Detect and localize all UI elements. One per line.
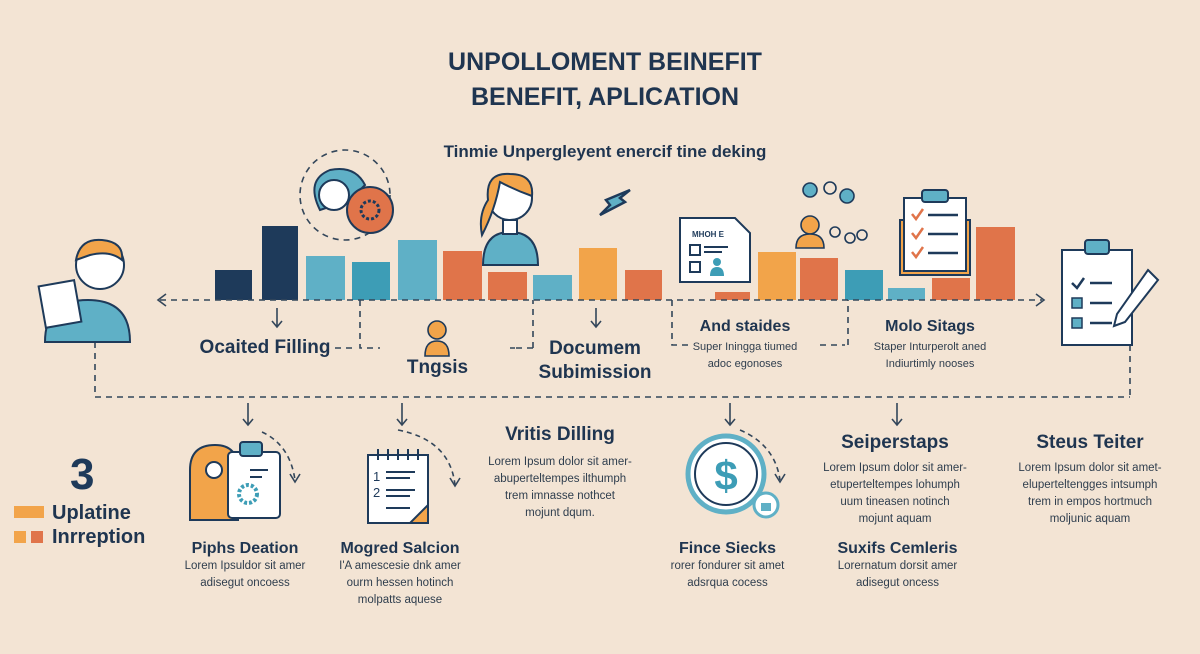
icon: dollar coin — [688, 436, 778, 517]
icon: clipboard right — [1062, 240, 1158, 345]
icon: document — [680, 218, 750, 282]
title — [448, 48, 762, 111]
text: Indiurtimly nooses — [886, 358, 974, 370]
title: UNPOLLOMENT BEINEFIT — [448, 48, 762, 76]
text: ourm hessen hotinch — [347, 577, 453, 589]
text: Vritis Dilling — [505, 424, 615, 445]
icon: small person — [425, 321, 449, 356]
text: Mogred Salcion — [340, 540, 460, 557]
text: Lorem Ipsum dolor sit amer- — [488, 456, 632, 468]
text: I'A amescesie dnk amer — [339, 560, 461, 572]
text: adoc egonoses — [708, 358, 782, 370]
legend: 3 — [70, 450, 94, 499]
icon: woman — [481, 174, 538, 265]
text: trem in empos hortmuch — [1028, 496, 1152, 508]
text: Suxifs Cemleris — [837, 540, 958, 557]
text: trem imnasse nothcet — [505, 490, 615, 502]
bottom items — [185, 540, 306, 589]
text: Steus Teiter — [1036, 432, 1144, 453]
text: Uplatine — [52, 502, 131, 524]
icon: notepad — [368, 449, 428, 523]
text: molpatts aquese — [358, 594, 442, 606]
bottom items: Lorem Ipsuldor sit amer — [185, 560, 305, 572]
text: mojunt aquam — [859, 513, 931, 525]
text: Fince Siecks — [679, 540, 776, 557]
bottom items: Piphs Deation — [192, 540, 298, 557]
bar chart — [215, 226, 1015, 300]
icon: notepad: 2 — [373, 485, 380, 500]
icon: arrow up right — [600, 190, 630, 215]
text: Staper Inturperolt aned — [874, 341, 986, 353]
text: uum tineasen notinch — [840, 496, 950, 508]
icon: people network — [796, 182, 867, 248]
icon: document: MHOH E — [692, 230, 725, 239]
step labels: Ocaited Filling — [200, 337, 330, 358]
bottom items: adisegut oncoess — [200, 577, 290, 589]
text: Seiperstaps — [841, 432, 949, 453]
text: adisegut oncess — [856, 577, 939, 589]
text: Lorem Ipsum dolor sit amer- — [823, 462, 967, 474]
text: abuperteltempes ilthumph — [494, 473, 626, 485]
text: Lorernatum dorsit amer — [838, 560, 957, 572]
text: adsrqua cocess — [687, 577, 768, 589]
legend squares — [14, 506, 44, 543]
icon: notepad: 1 — [373, 469, 380, 484]
text: Super Iningga tiumed — [693, 341, 797, 353]
text: Subimission — [539, 362, 651, 383]
text: etuperteltempes lohumph — [830, 479, 960, 491]
text: Tngsis — [407, 357, 468, 378]
title: BENEFIT, APLICATION — [471, 83, 739, 111]
icon: head with clipboard — [190, 442, 280, 520]
text: rorer fondurer sit amet — [671, 560, 784, 572]
text: mojunt dqum. — [525, 507, 595, 519]
icon: clipboard checklist — [900, 190, 970, 275]
icon: person left — [39, 240, 130, 342]
text: Inrreption — [52, 526, 145, 548]
text: Documem — [549, 338, 641, 359]
timeline arrows — [158, 294, 1044, 486]
subtitle: Tinmie Unpergleyent enercif tine deking — [444, 142, 766, 161]
icon: head and gear — [300, 150, 393, 240]
text: moljunic aquam — [1050, 513, 1130, 525]
text: Lorem Ipsum dolor sit amet- — [1018, 462, 1162, 474]
text: Molo Sitags — [885, 318, 975, 335]
text: And staides — [700, 318, 790, 335]
text: eluperteltengges intsumph — [1023, 479, 1157, 491]
icon: dollar coin: $ — [714, 452, 738, 499]
